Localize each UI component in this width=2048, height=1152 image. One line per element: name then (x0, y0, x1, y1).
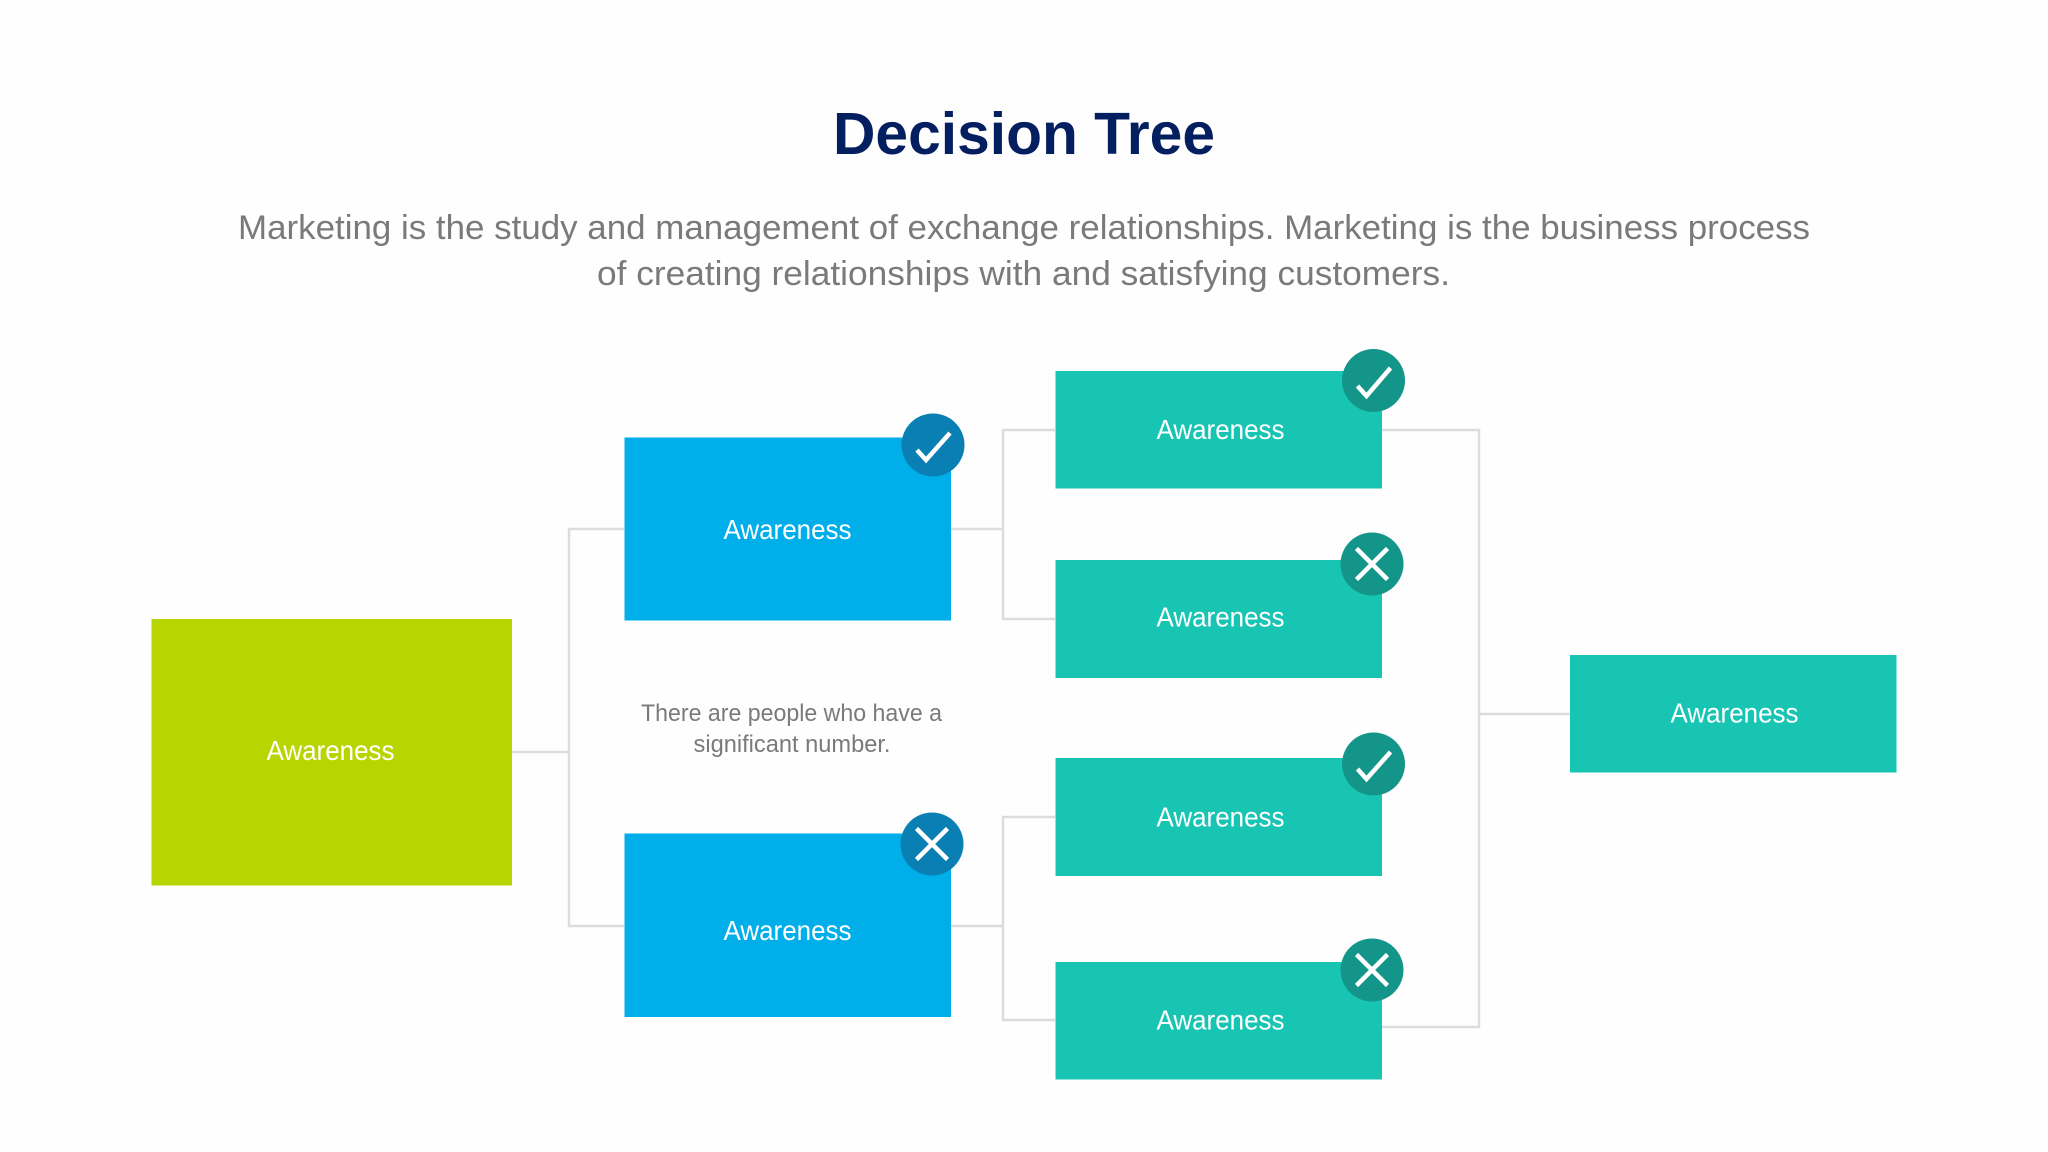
icon: check on teal node 1 (1342, 349, 1405, 412)
icon: check on upper blue node (902, 414, 964, 476)
subtitle text: of creating relationships with and satisfying customers. (597, 255, 1450, 293)
node: upper blue awareness (624, 438, 951, 620)
icon: cross on teal node 4 (1340, 938, 1404, 1002)
node: teal awareness 4 (1056, 962, 1382, 1080)
caption text: significant number. (694, 731, 890, 758)
node: outcome awareness: Awareness (1670, 698, 1798, 728)
node: root awareness: Awareness (266, 735, 394, 766)
subtitle text (238, 209, 1810, 293)
node: teal awareness 3: Awareness (1156, 802, 1284, 832)
node: lower blue awareness: Awareness (724, 915, 852, 946)
node: outcome awareness (1570, 655, 1896, 772)
node: teal awareness 3 (1056, 758, 1382, 876)
node: teal awareness 1: Awareness (1156, 414, 1284, 445)
connector: lower blue node to teal nodes (951, 817, 1055, 1020)
node: teal awareness 2 (1056, 560, 1382, 678)
title: Decision Tree (833, 101, 1215, 167)
caption text (641, 700, 943, 758)
connector: upper blue node to teal nodes (951, 430, 1055, 619)
subtitle text: Marketing is the study and management of exchange relationships. Marketing is the business process (238, 209, 1810, 247)
node: teal awareness 4: Awareness (1156, 1004, 1284, 1036)
connector: teal nodes to outcome node (1382, 430, 1570, 1027)
icon: cross on lower blue node (900, 812, 964, 876)
node: lower blue awareness (624, 834, 951, 1017)
icon: check on teal node 3 (1342, 732, 1405, 796)
connector: root to blue nodes (512, 529, 624, 926)
node: teal awareness 2: Awareness (1156, 602, 1284, 632)
node: teal awareness 1 (1056, 371, 1382, 488)
caption text: There are people who have a (641, 700, 943, 727)
icon: cross on teal node 2 (1340, 532, 1404, 596)
node: root awareness (152, 619, 512, 886)
node: upper blue awareness: Awareness (724, 514, 852, 545)
